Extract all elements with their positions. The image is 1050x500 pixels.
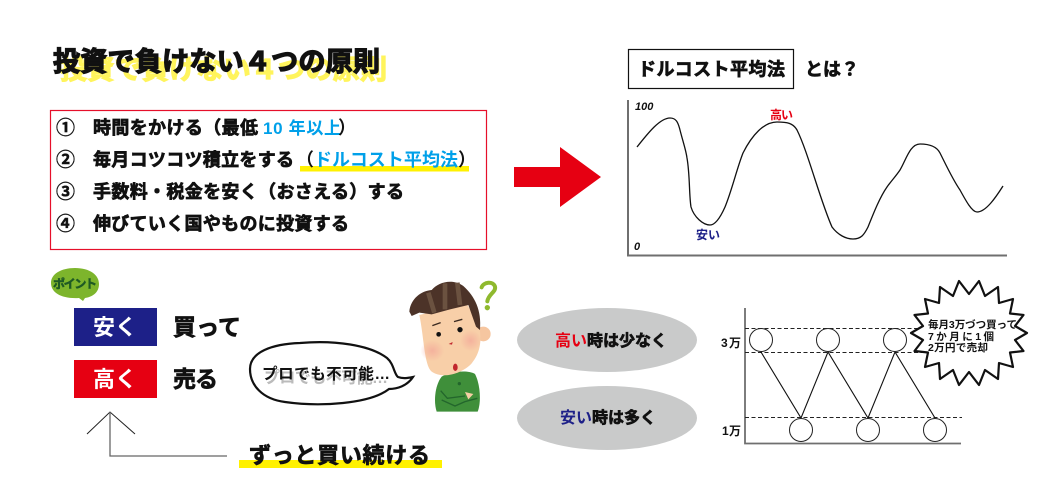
arrow: red right arrow — [514, 147, 601, 207]
starburst callout: 毎月3万づつ買って — [928, 318, 1017, 331]
man body — [435, 371, 480, 412]
illustration: thinking man — [409, 282, 495, 412]
line chart: price curve: 100 — [635, 101, 654, 113]
oval: buy more when low: 時は多く — [592, 409, 656, 427]
icon: question mark — [482, 283, 495, 301]
principle 1: 時間をかける（最低 — [93, 118, 258, 138]
label: buy low: 安く — [93, 315, 137, 340]
label: low: 安い — [696, 227, 720, 242]
label: sell high: 高く — [93, 367, 137, 392]
principle 3: 手数料・税金を安く（おさえる）する — [93, 182, 404, 202]
label: sell high: 売る — [173, 366, 218, 392]
principle 3: ③ — [56, 181, 75, 203]
oval: buy more when low: 安い — [560, 408, 592, 427]
line chart: price curve — [628, 100, 1007, 256]
principle 2: ドルコスト平均法 — [314, 150, 458, 170]
axis label: 3万: 3 万 — [721, 336, 741, 350]
title: 投資で負けない４つの原則 — [60, 55, 387, 85]
line chart: price curve: 0 — [634, 241, 641, 253]
label: high: 高い — [770, 107, 793, 122]
arrow: keep buying to high/low — [87, 412, 227, 456]
principle 1: ） — [338, 118, 356, 138]
principle 4: ④ — [56, 213, 75, 235]
starburst callout: 7か月に1個 — [928, 330, 994, 343]
principle 1: ① — [56, 117, 75, 139]
speech bubble: プロでも不可能… — [262, 364, 390, 383]
badge: point — [51, 268, 99, 301]
oval: buy less when high: 高い — [555, 331, 587, 350]
oval: buy more when low — [517, 386, 697, 450]
callout: keep buying: ずっと買い続ける — [249, 443, 430, 468]
principle 4: 伸びていく国やものに投資する — [93, 214, 349, 234]
principle 2: ② — [56, 149, 75, 171]
label: buy low: 買って — [173, 314, 241, 340]
axis label: 1万: 1 万 — [722, 424, 741, 438]
speech bubble — [250, 342, 413, 404]
principle 2: （ — [296, 150, 314, 170]
man face — [432, 319, 462, 326]
panel: four principles — [50, 110, 486, 250]
speech bubble: プロでも不可能… — [264, 368, 388, 387]
oval: buy less when high — [517, 308, 697, 372]
starburst callout — [911, 281, 1027, 385]
principle 1 — [56, 117, 356, 139]
label: buy low — [74, 308, 241, 346]
label: sell high — [74, 360, 218, 398]
principle 2 — [56, 149, 476, 172]
title: 投資で負けない４つの原則 — [53, 47, 380, 77]
heading: dollar cost averaging: ドルコスト平均法 — [638, 60, 785, 80]
man hair — [409, 282, 480, 330]
heading: dollar cost averaging — [628, 50, 859, 88]
principle 2: ） — [458, 150, 476, 170]
badge: point: ポイント — [53, 277, 97, 291]
oval: buy less when high: 時は少なく — [587, 332, 667, 350]
man head — [476, 327, 491, 341]
principle 1: 10 年以上 — [263, 118, 341, 138]
zigzag chart: 1万 to 3万 — [721, 308, 962, 444]
heading: dollar cost averaging: とは？ — [805, 60, 859, 80]
starburst callout: 2万円で売却 — [928, 341, 988, 354]
principle 2: 毎月コツコツ積立をする — [93, 150, 294, 170]
